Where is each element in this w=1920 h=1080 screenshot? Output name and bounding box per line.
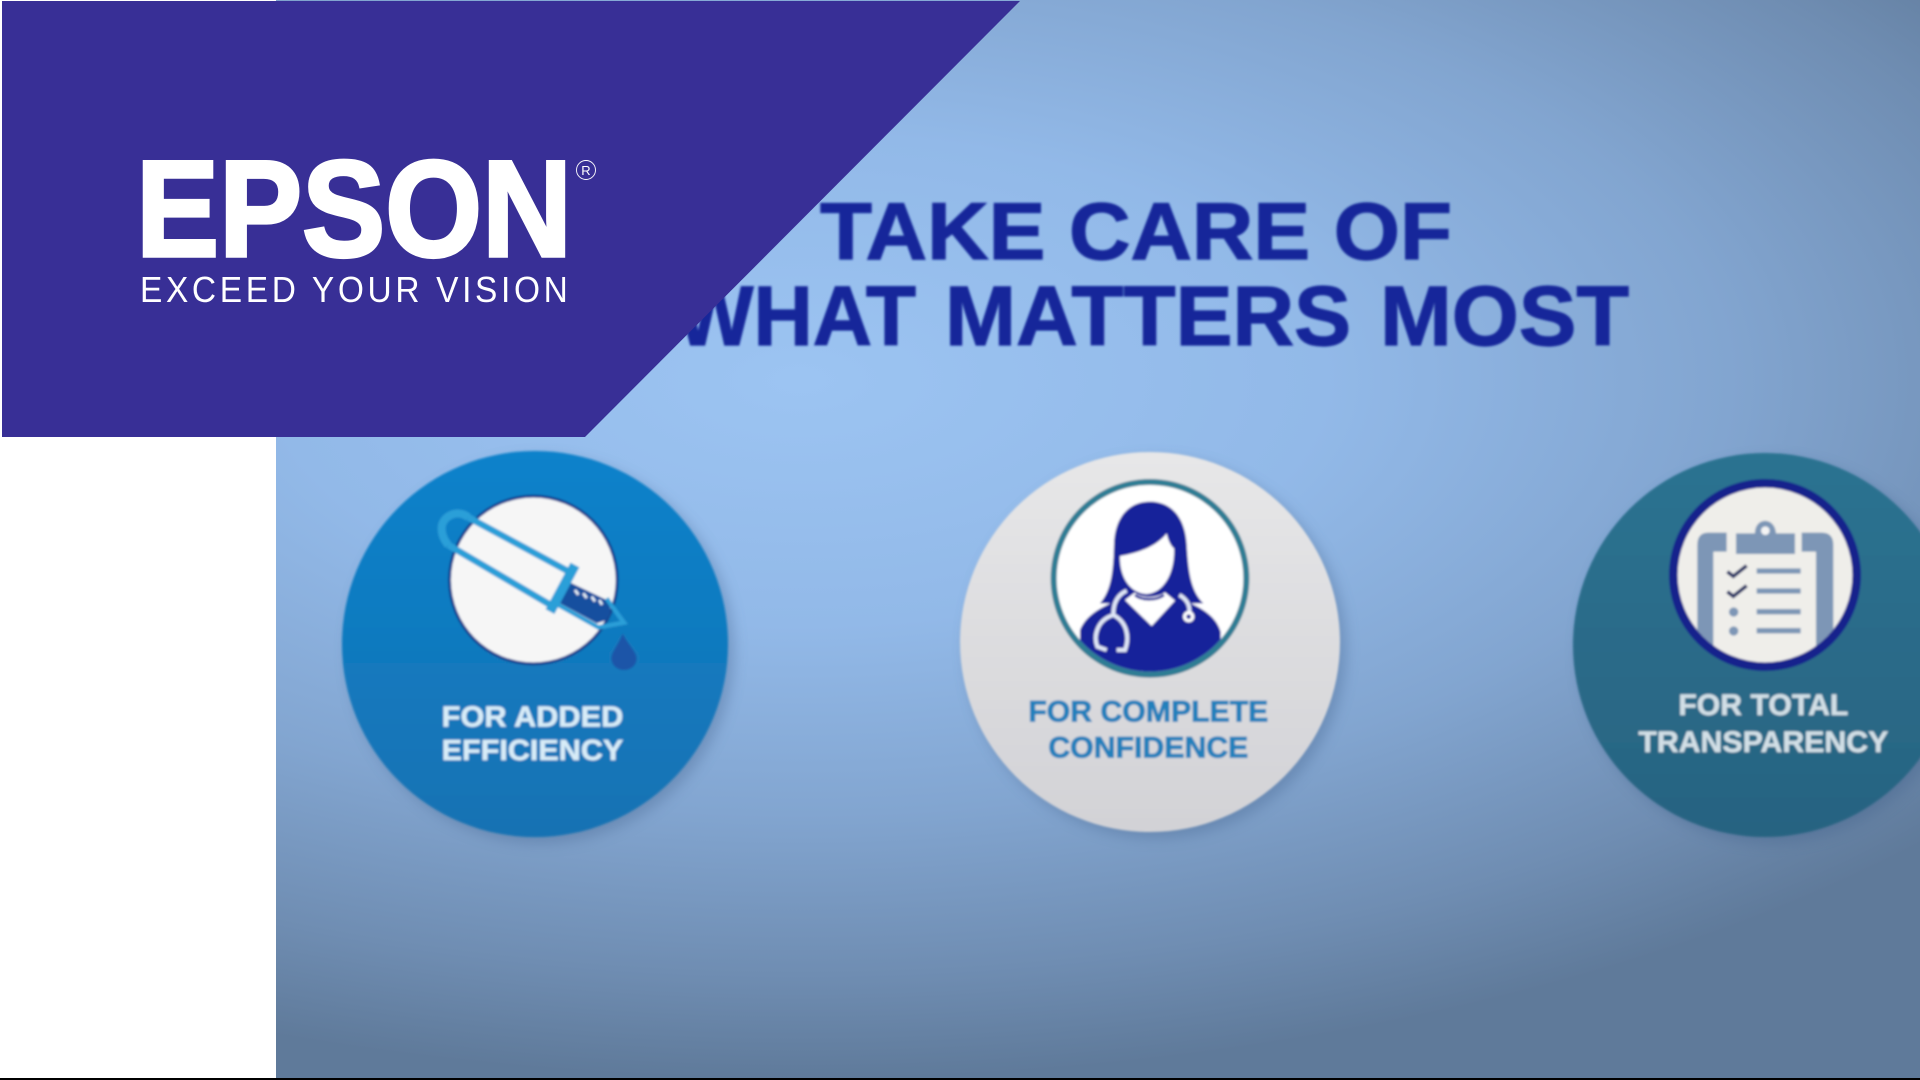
label: for added efficiency: FOR ADDED bbox=[442, 702, 623, 734]
icon: doctor bbox=[1051, 479, 1249, 683]
logo: Epson wordmark: EPSON bbox=[136, 133, 572, 286]
icon: drop bbox=[611, 633, 637, 670]
title bbox=[676, 187, 1629, 363]
panel: confidence circle bbox=[960, 452, 1346, 838]
panel: transparency circle bbox=[1573, 453, 1920, 843]
title: TAKE CARE OF bbox=[820, 187, 1452, 277]
label: for complete confidence: CONFIDENCE bbox=[1048, 732, 1248, 765]
banner: Epson logo panel bbox=[2, 1, 1020, 437]
panel: efficiency circle bbox=[342, 451, 734, 843]
icon: clipboard bbox=[1669, 479, 1861, 671]
title: WHAT bbox=[676, 269, 916, 363]
label: for added efficiency: EFFICIENCY bbox=[442, 735, 623, 767]
icon: white disc with dropper bbox=[442, 495, 637, 670]
label: for total transparency: FOR TOTAL bbox=[1678, 689, 1848, 722]
label: for complete confidence bbox=[1028, 696, 1268, 765]
label: for total transparency: TRANSPARENCY bbox=[1638, 726, 1888, 759]
title: MATTERS bbox=[945, 269, 1351, 363]
title: MOST bbox=[1380, 269, 1629, 363]
logo: Epson wordmark: EXCEED YOUR VISION bbox=[140, 271, 568, 310]
label: for added efficiency bbox=[442, 702, 623, 767]
bottom edge bbox=[0, 1078, 1920, 1080]
logo: Epson wordmark: R bbox=[581, 163, 591, 178]
label: for complete confidence: FOR COMPLETE bbox=[1028, 696, 1268, 729]
label: for total transparency bbox=[1638, 689, 1888, 759]
